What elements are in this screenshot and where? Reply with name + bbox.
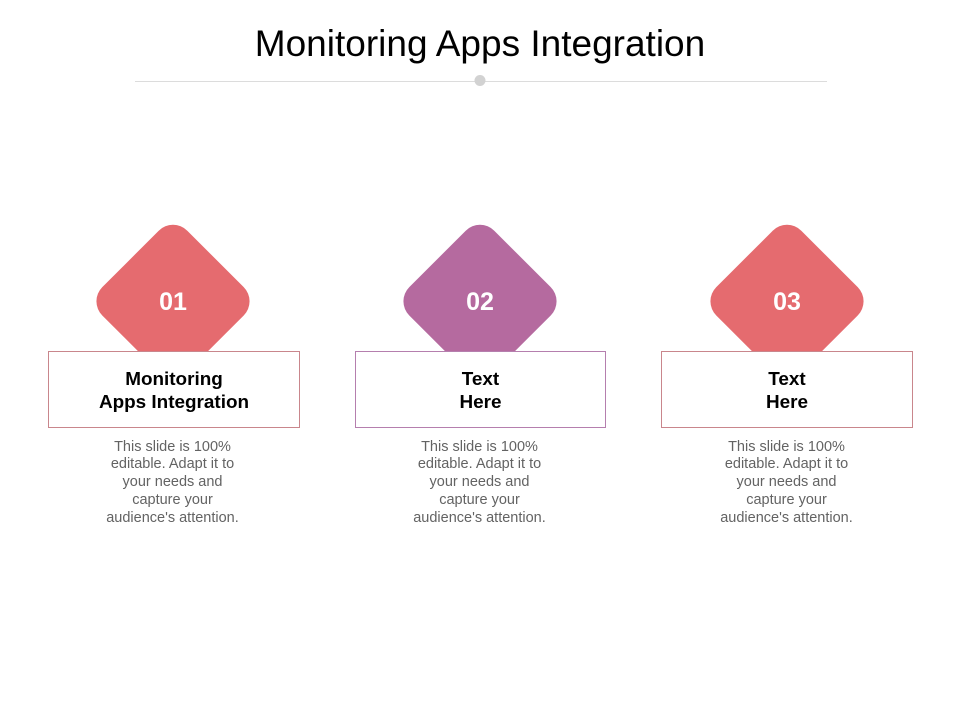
number 03: 03 — [773, 288, 801, 316]
label box 01 — [48, 351, 300, 428]
label box 03: Text — [768, 369, 806, 390]
icon: diamond 01 — [96, 224, 250, 351]
label box 03: Here — [766, 392, 808, 413]
panel: item 03 — [661, 224, 913, 526]
description 03: audience's attention. — [720, 510, 853, 526]
description 01 — [106, 438, 239, 526]
icon: diamond 02 — [403, 224, 557, 351]
description 03: This slide is 100% — [728, 438, 845, 454]
label box 03 — [661, 351, 913, 428]
label box 02: Text — [462, 369, 499, 390]
panel: item 01 — [48, 224, 300, 526]
description 02: editable. Adapt it to — [418, 456, 541, 472]
description 03 — [720, 438, 853, 526]
description 01: audience's attention. — [106, 510, 239, 526]
description 02: your needs and — [430, 474, 529, 490]
label box 02 — [355, 351, 606, 428]
label box 01: Monitoring — [125, 369, 223, 390]
description 01: your needs and — [123, 474, 222, 490]
description 02: capture your — [439, 492, 520, 508]
description 01: editable. Adapt it to — [111, 456, 234, 472]
description 01: capture your — [132, 492, 213, 508]
title: Monitoring Apps Integration — [255, 23, 705, 64]
description 02 — [413, 438, 546, 526]
label box 02: Here — [459, 392, 502, 413]
description 02: audience's attention. — [413, 510, 546, 526]
description 01: This slide is 100% — [114, 438, 231, 454]
header divider with dot — [135, 75, 827, 86]
number 01: 01 — [159, 288, 187, 316]
description 03: your needs and — [737, 474, 836, 490]
panel: item 02 — [355, 224, 606, 526]
number 02: 02 — [466, 288, 494, 316]
description 02: This slide is 100% — [421, 438, 538, 454]
description 03: editable. Adapt it to — [725, 456, 848, 472]
icon: diamond 03 — [710, 224, 864, 351]
description 03: capture your — [746, 492, 827, 508]
label box 01: Apps Integration — [99, 392, 249, 413]
